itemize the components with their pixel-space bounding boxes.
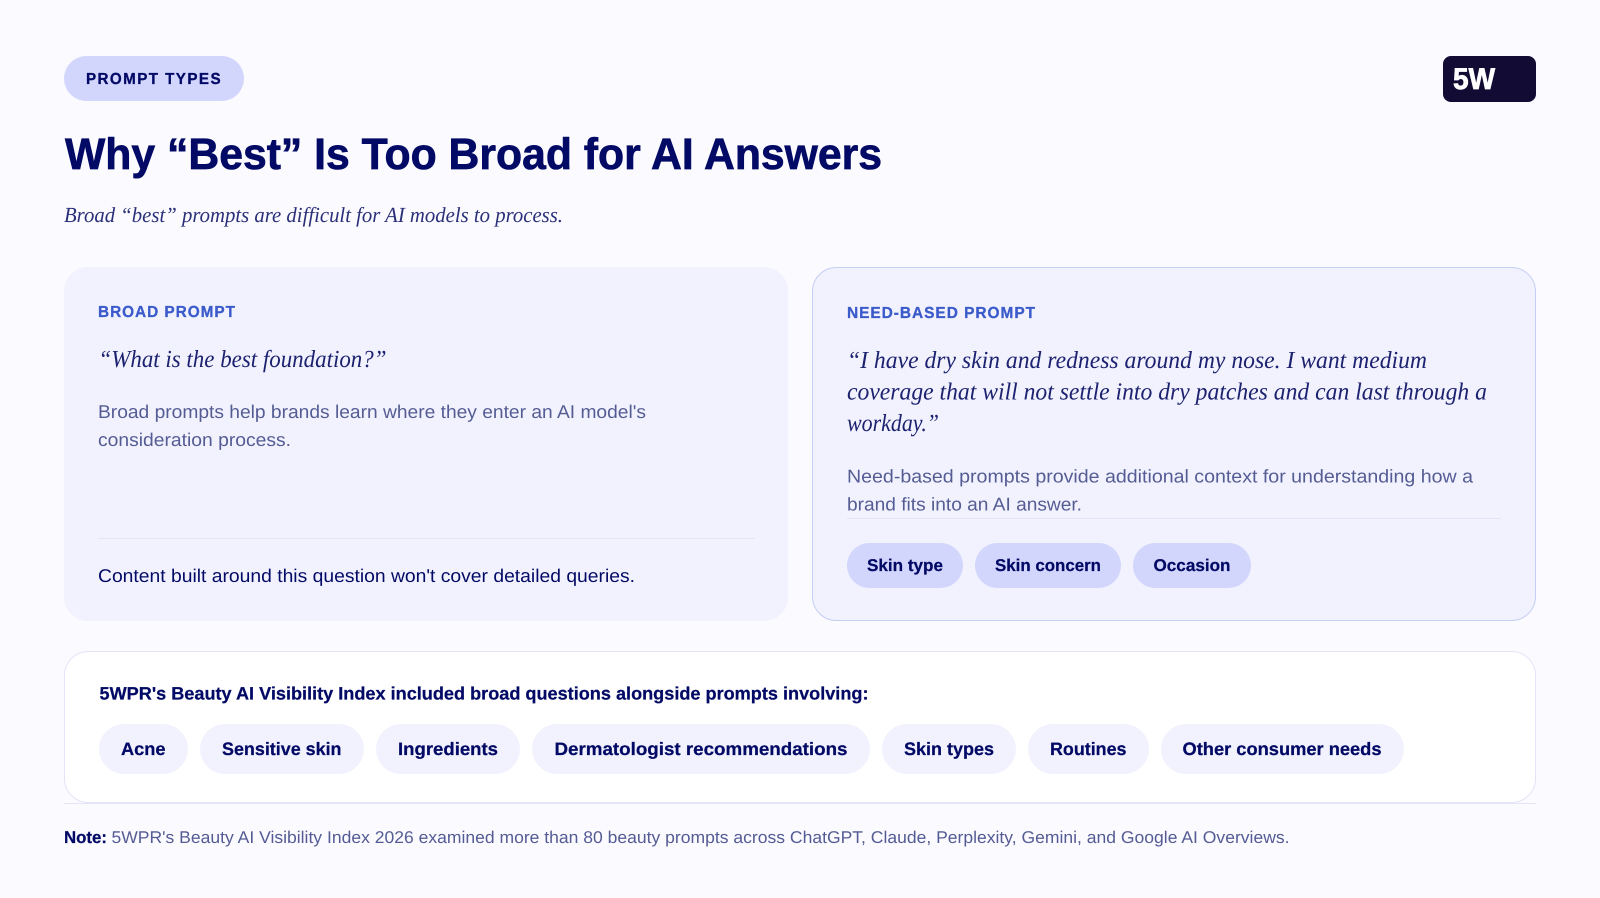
panel: index prompts [64,652,1536,802]
footnote: 5WPR's Beauty AI Visibility Index 2026 examined more than 80 beauty prompts across ChatGPT, Claude, Perplexity, Gemini, and Google AI Overviews. [112,828,1290,847]
quote: broad prompt: “What is the best foundation?” [98,346,386,373]
chip: acne: Acne [121,739,166,759]
logo: 5W [1443,56,1536,102]
chip: routines [1028,724,1149,774]
quote: need-based prompt: “I have dry skin and redness around my nose. I want medium [847,347,1427,374]
chip: occasion: Occasion [1154,556,1230,575]
chip: ingredients [376,724,520,774]
badge: prompt types [64,56,244,101]
chip: sensitive skin: Sensitive skin [222,739,342,759]
chip: other consumer needs: Other consumer needs [1182,739,1382,759]
chip: sensitive skin [200,724,364,774]
body text: broad prompt: Broad prompts help brands learn where they enter an AI model's [98,401,646,422]
chip: skin type [847,543,963,588]
quote: need-based prompt [847,347,1487,437]
chip: dermatologist recommendations [532,724,870,774]
title: Why “Best” Is Too Broad for AI Answers [65,130,882,179]
chip: skin types [882,724,1016,774]
chip: ingredients: Ingredients [398,739,498,759]
body text: need-based prompt: Need-based prompts provide additional context for understanding how a [847,466,1474,486]
chip: occasion [1133,543,1251,588]
panel: broad prompt [64,267,788,621]
chip: skin concern [975,543,1121,588]
body text: broad prompt: consideration process. [98,429,291,450]
body text: broad prompt [98,401,646,450]
chip: routines: Routines [1050,739,1126,759]
chip: dermatologist recommendations: Dermatologist recommendations [554,739,848,759]
chip: skin type: Skin type [867,556,943,575]
takeaway: broad prompt: Content built around this question won't cover detailed queries. [98,565,635,586]
footnote: Note: [64,828,107,847]
chip: skin types: Skin types [904,739,994,759]
panel: need-based prompt [812,268,1536,620]
body text: need-based prompt [847,466,1474,514]
logo: 5W: 5W [1453,63,1496,96]
quote: need-based prompt: workday.” [847,410,939,437]
chip: acne [99,724,188,774]
panel label: broad prompt: BROAD PROMPT [98,304,236,321]
quote: need-based prompt: coverage that will not settle into dry patches and can last through a [847,378,1487,406]
body text: need-based prompt: brand fits into an AI answer. [847,494,1082,514]
panel label: need-based prompt: NEED-BASED PROMPT [847,305,1036,322]
header [64,56,1536,227]
panel heading: 5WPR's Beauty AI Visibility Index included broad questions alongside prompts involving: [100,684,868,704]
chip: other consumer needs [1161,724,1404,774]
badge: prompt types: PROMPT TYPES [86,71,222,88]
subtitle: Broad “best” prompts are difficult for AI models to process. [64,203,563,227]
chip: skin concern: Skin concern [995,556,1101,575]
